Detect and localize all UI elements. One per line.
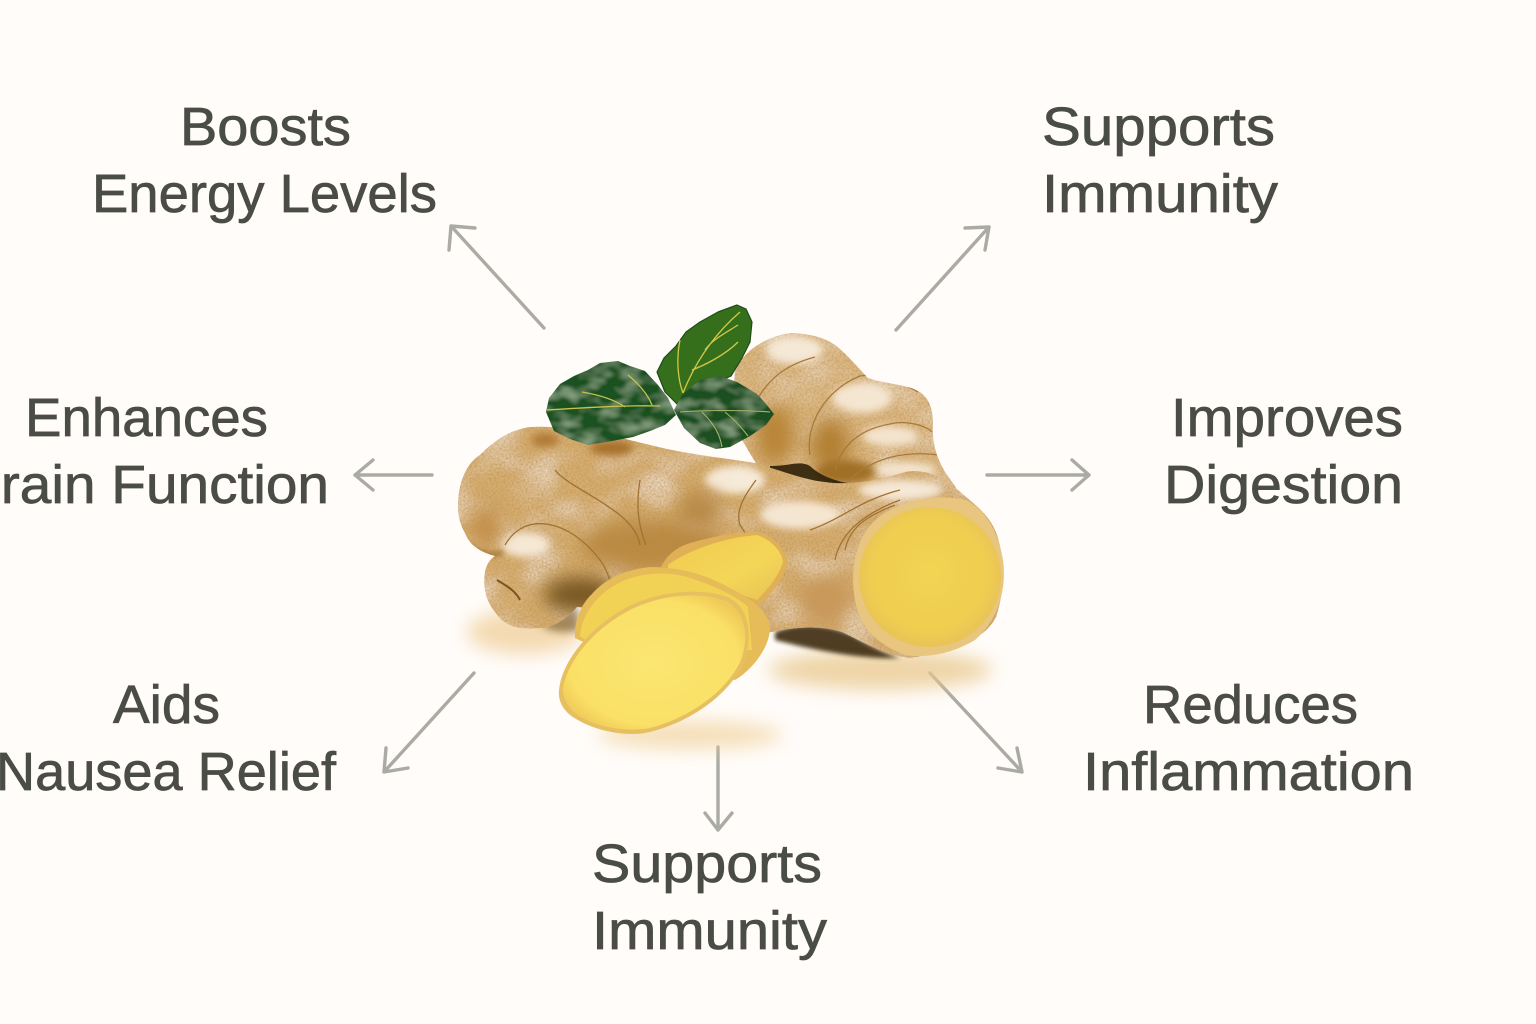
label: Improves Digestion: Digestion [1164, 455, 1403, 515]
arrow: to Boosts Energy Levels [449, 226, 544, 328]
label: Supports Immunity, bottom: Supports [592, 834, 822, 894]
ginger main body [458, 427, 1003, 658]
ginger slice, front [559, 592, 749, 734]
label: Reduces Inflammation [1083, 675, 1414, 802]
ground shadow [467, 604, 992, 749]
label: Reduces Inflammation: Reduces [1143, 675, 1358, 735]
label: Aids Nausea Relief: Nausea Relief [0, 742, 337, 802]
label: Supports Immunity, bottom [592, 834, 827, 961]
mint leaf, right [674, 376, 774, 449]
ginger upper lobe [730, 333, 958, 500]
label: Supports Immunity, top right [1042, 97, 1278, 224]
infographic: ginger health benefits [0, 106, 1411, 960]
ginger slice, back [660, 532, 788, 610]
label: Enhances Brain Function [0, 388, 329, 515]
label: Boosts Energy Levels [92, 97, 437, 224]
label: Supports Immunity, bottom: Immunity [592, 901, 827, 961]
label: Supports Immunity, top right: Supports [1042, 97, 1275, 157]
label: Aids Nausea Relief: Aids [113, 675, 220, 735]
arrow: to Reduces Inflammation [930, 673, 1022, 772]
label: Supports Immunity, top right: Immunity [1042, 164, 1278, 224]
arrow: to Aids Nausea Relief [384, 673, 474, 772]
label: Reduces Inflammation: Inflammation [1083, 742, 1414, 802]
label: Boosts Energy Levels: Boosts [180, 97, 351, 157]
shadow gap between lobes [770, 463, 858, 486]
arrow: to Supports Immunity, top right [896, 227, 989, 330]
label: Enhances Brain Function: Enhances [25, 388, 268, 448]
label: Boosts Energy Levels: Energy Levels [92, 164, 437, 224]
arrow: to Supports Immunity, bottom [705, 747, 732, 830]
mint leaf, top [657, 305, 752, 404]
cut face of ginger [848, 496, 1012, 658]
arrow: to Enhances Brain Function [355, 460, 432, 490]
ginger slice, middle [575, 567, 770, 680]
mint leaf, left [546, 361, 676, 445]
label: Improves Digestion: Improves [1171, 388, 1403, 448]
label: Improves Digestion [1164, 388, 1403, 515]
label: Aids Nausea Relief [0, 675, 337, 802]
arrow: to Improves Digestion [987, 460, 1089, 490]
illustration: ginger root with mint leaves [458, 305, 1012, 749]
